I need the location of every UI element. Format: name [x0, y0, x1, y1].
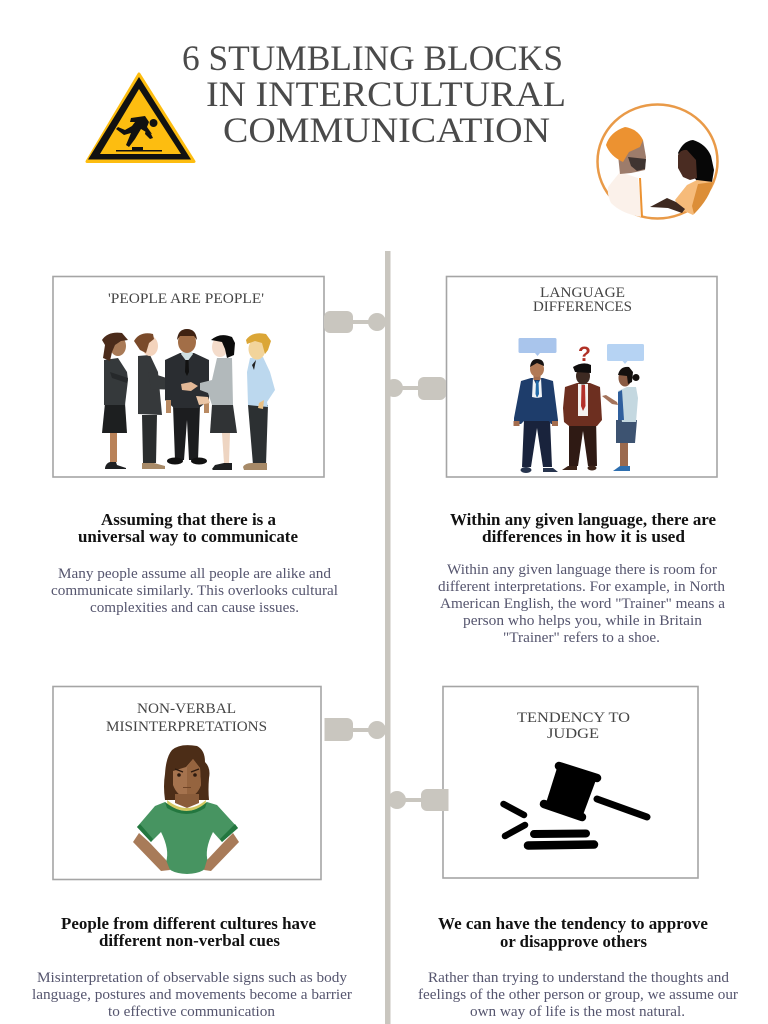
panel description: own way of life is the most natural. [470, 1004, 685, 1020]
panel description [51, 566, 338, 616]
card frame [443, 686, 698, 878]
panel: language differences [385, 276, 726, 646]
card label: TENDENCY TO [517, 710, 630, 726]
panel heading [438, 914, 708, 951]
panel heading: universal way to communicate [78, 527, 298, 546]
card label: DIFFERENCES [533, 299, 632, 315]
panel description [438, 562, 726, 646]
panel description: communicate similarly. This overlooks cultural [51, 583, 338, 599]
panel heading: differences in how it is used [482, 527, 686, 546]
card frame [53, 686, 321, 880]
panel description: feelings of the other person or group, we assume our [418, 987, 738, 1003]
card label: NON-VERBAL [137, 701, 236, 717]
title: COMMUNICATION [223, 110, 550, 150]
title: 6 STUMBLING BLOCKS [182, 38, 563, 78]
illustration: angry woman with hands on hips [133, 745, 239, 874]
panel: tendency to judge [388, 686, 738, 1020]
panel heading: different non-verbal cues [99, 931, 280, 950]
panel description: complexities and can cause issues. [90, 600, 299, 616]
panel: non-verbal misinterpretations [32, 686, 386, 1020]
panel description: Within any given language there is room for [447, 562, 717, 578]
panel heading: Assuming that there is a [101, 510, 276, 529]
panel heading [61, 914, 316, 950]
panel heading [450, 510, 716, 546]
panel heading: or disapprove others [500, 932, 647, 951]
icon: gavel [504, 766, 647, 846]
timeline spine [385, 251, 390, 1024]
panel description: "Trainer" refers to a shoe. [503, 630, 660, 646]
panel description: Rather than trying to understand the thoughts and [428, 970, 730, 986]
panel heading: Within any given language, there are [450, 510, 716, 529]
panel description: Many people assume all people are alike and [58, 566, 332, 582]
card label [517, 710, 630, 742]
card label: MISINTERPRETATIONS [106, 719, 267, 735]
panel description [418, 970, 738, 1020]
card label: LANGUAGE [540, 285, 625, 301]
card label: JUDGE [547, 726, 599, 742]
panel description: to effective communication [108, 1004, 276, 1020]
panel heading: People from different cultures have [61, 914, 316, 933]
panel description: language, postures and movements become a barrier [32, 987, 352, 1003]
panel description: different interpretations. For example, in North [438, 579, 726, 595]
illustration: five business people [102, 329, 275, 470]
panel heading [78, 510, 298, 546]
connector [388, 789, 448, 811]
icon: two people talking in orange circle [598, 104, 718, 218]
card label [533, 285, 632, 315]
card frame [446, 276, 717, 477]
card frame [53, 276, 324, 477]
panel description: person who helps you, while in Britain [463, 613, 703, 629]
icon: warning triangle with tripping figure [87, 74, 194, 162]
illustration: three people with speech bubbles: ? [578, 343, 591, 366]
panel description [32, 970, 352, 1020]
connector [324, 718, 386, 741]
panel heading: We can have the tendency to approve [438, 914, 708, 933]
card label [106, 701, 267, 735]
title [182, 38, 566, 150]
connector [324, 311, 386, 333]
title: IN INTERCULTURAL [206, 74, 566, 114]
panel description: Misinterpretation of observable signs such as body [37, 970, 348, 986]
illustration: three people with speech bubbles [514, 338, 644, 473]
card label: 'PEOPLE ARE PEOPLE' [108, 291, 264, 307]
panel: people are people [51, 276, 386, 616]
panel description: American English, the word "Trainer" means a [440, 596, 726, 612]
connector [385, 377, 446, 400]
